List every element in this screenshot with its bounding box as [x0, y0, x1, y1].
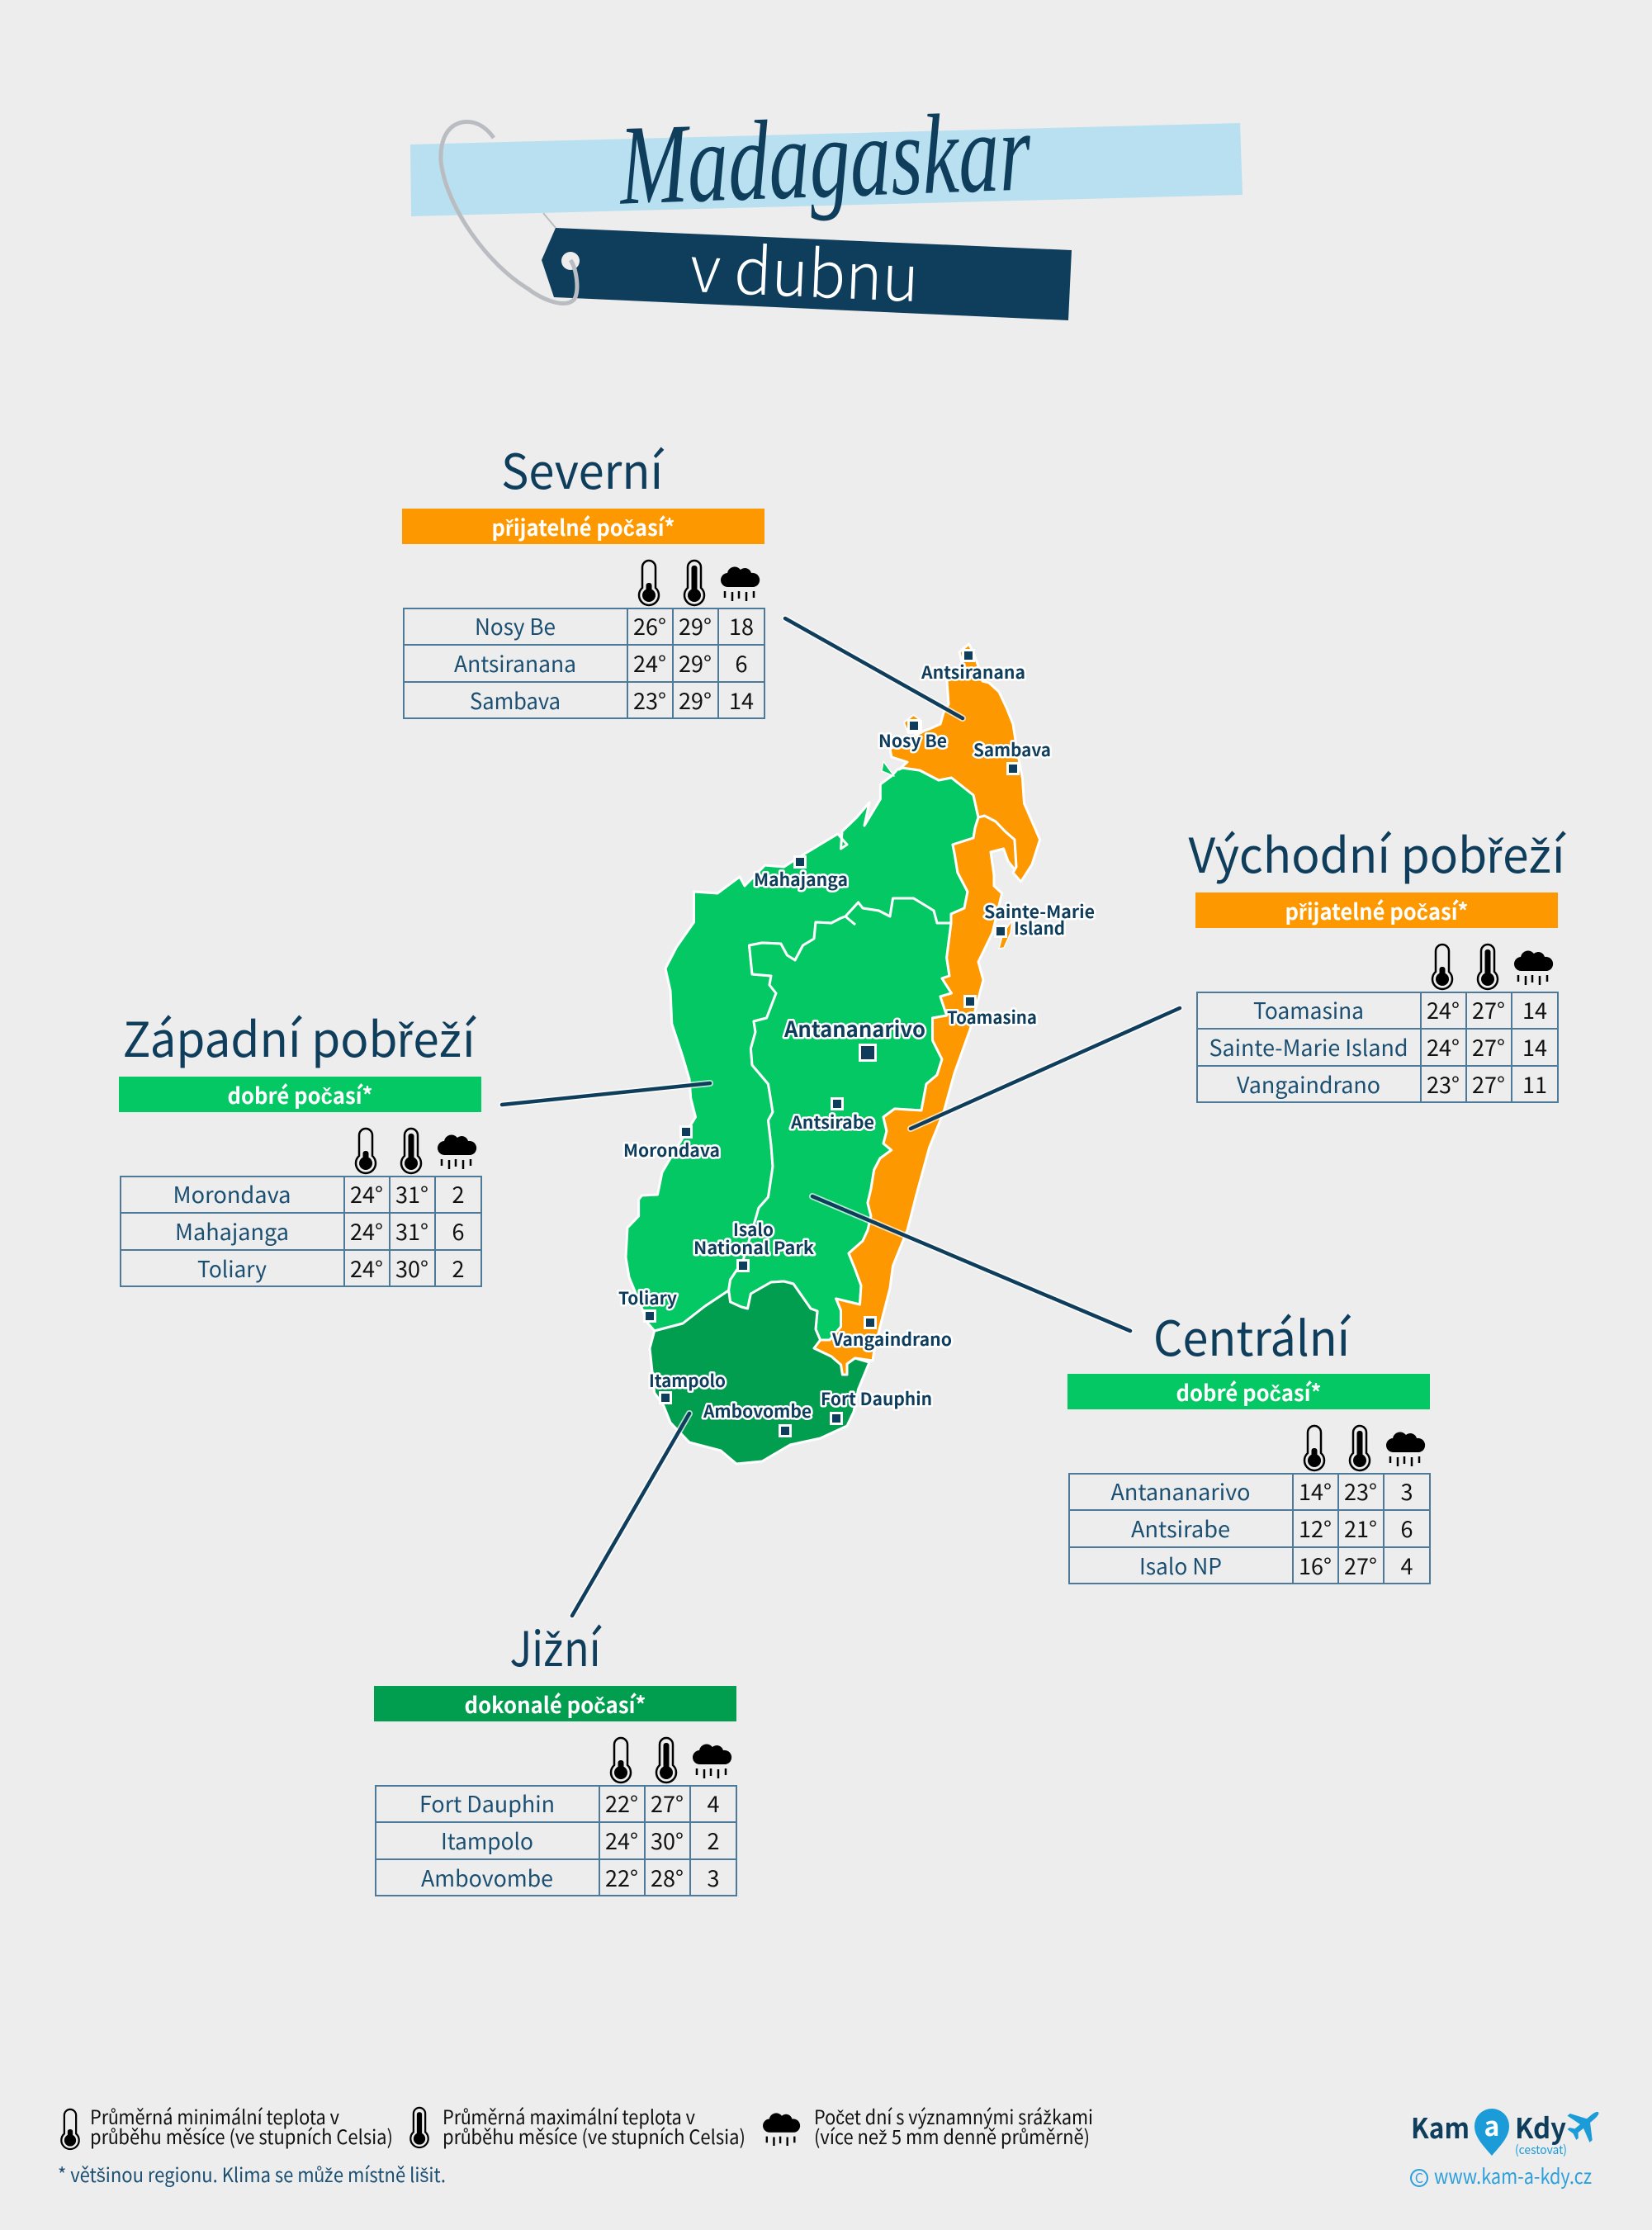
table: 14 — [729, 684, 754, 716]
city labels: Toamasina — [947, 1005, 1037, 1030]
region: south — [650, 1281, 869, 1464]
table: 12° — [1299, 1512, 1332, 1544]
table: 6 — [1400, 1512, 1413, 1544]
legend text: maximum temperature: průběhu měsíce (ve stupních Celsia) — [443, 2121, 746, 2150]
dark tag — [542, 228, 1072, 320]
table: Fort Dauphin — [419, 1787, 555, 1819]
tag ring — [441, 122, 577, 303]
island: Sainte-Marie — [999, 921, 1012, 949]
panel: Východní pobřeží — [1189, 817, 1567, 1102]
city labels: Vangaindrano — [831, 1327, 952, 1352]
footnote: * většinou regionu. Klima se může místně lišit. — [58, 2159, 446, 2188]
leader: Západní pobřeží — [502, 1083, 710, 1105]
weather rating bar: dobré počasí* — [228, 1078, 373, 1110]
island: Nosy Be — [904, 715, 921, 733]
title: Madagaskar: Madagaskar — [616, 88, 1034, 229]
table: Isalo NP — [1139, 1549, 1222, 1581]
heading: Východní pobřeží — [1189, 817, 1567, 887]
table: 27° — [651, 1787, 684, 1819]
tag ring back — [543, 213, 556, 228]
table: 23° — [633, 684, 666, 716]
weather rating bar: přijatelné počasí* — [492, 510, 675, 542]
weather rating bar — [1195, 892, 1558, 928]
table icons — [611, 1738, 731, 1783]
weather rating bar — [402, 509, 764, 544]
table: 18 — [729, 609, 754, 642]
legend text: maximum temperature — [443, 2101, 746, 2150]
table: 4 — [1400, 1549, 1413, 1581]
table: 29° — [679, 646, 712, 679]
table: 27° — [1472, 1030, 1505, 1063]
table: 3 — [1400, 1475, 1413, 1507]
city labels: Morondava — [623, 1138, 720, 1162]
table: Nosy Be — [475, 609, 556, 642]
table — [1069, 1474, 1430, 1584]
table: Antananarivo — [1111, 1475, 1250, 1507]
title banner — [410, 88, 1243, 320]
legend text: rain days: (více než 5 mm denně průměrně) — [814, 2121, 1090, 2150]
leader: Severní — [785, 618, 963, 718]
table: Antsiranana — [454, 646, 576, 679]
icon: rain days — [763, 2113, 800, 2146]
table icons — [639, 561, 760, 605]
logo: Kam a Kdy: Kdy — [1515, 2106, 1566, 2147]
table: Sambava — [470, 684, 561, 716]
website: www.kam-a-kdy.cz — [1434, 2161, 1592, 2190]
table: 4 — [707, 1787, 720, 1819]
region: east coast — [814, 816, 1016, 1375]
table: 24° — [1427, 993, 1460, 1025]
city labels: Antananarivo — [783, 1013, 925, 1044]
panel: Centrální — [1067, 1300, 1430, 1584]
panel: Jižní — [374, 1611, 736, 1896]
table — [1197, 992, 1558, 1102]
table: Ambovombe — [421, 1861, 553, 1893]
legend text: minimum temperature: Průměrná minimální teplota v — [90, 2101, 339, 2130]
table: 24° — [633, 646, 666, 679]
city labels: Antsiranana — [921, 660, 1025, 684]
table: Vangaindrano — [1237, 1068, 1380, 1100]
panel: Severní — [402, 433, 764, 718]
table: 11 — [1522, 1068, 1547, 1100]
city labels: Toliary — [618, 1285, 677, 1310]
legend text: minimum temperature: průběhu měsíce (ve stupních Celsia) — [90, 2121, 393, 2150]
islets: north-west — [882, 761, 894, 776]
table: 22° — [605, 1787, 638, 1819]
logo: Kam a Kdy — [1411, 2099, 1610, 2190]
heading: Centrální — [1153, 1300, 1351, 1370]
table: 29° — [679, 609, 712, 642]
light blue band — [410, 123, 1243, 216]
table: 14 — [1522, 1030, 1547, 1063]
table: 24° — [1427, 1030, 1460, 1063]
legend text: rain days: Počet dní s významnými srážkami — [814, 2101, 1093, 2130]
table icons — [1304, 1426, 1425, 1470]
table: 27° — [1472, 1068, 1505, 1100]
legend text: maximum temperature: Průměrná maximální teplota v — [443, 2101, 695, 2130]
table: 27° — [1472, 993, 1505, 1025]
legend text: minimum temperature — [90, 2101, 393, 2150]
heading: Jižní — [510, 1611, 602, 1680]
icon: maximum temperature — [410, 2108, 428, 2147]
city labels: National Park — [693, 1235, 814, 1260]
table: Morondava — [173, 1177, 291, 1210]
region: central — [729, 898, 951, 1340]
weather rating bar: dobré počasí* — [1176, 1375, 1321, 1408]
table: 23° — [1344, 1475, 1377, 1507]
table: Toamasina — [1253, 993, 1364, 1025]
table — [121, 1177, 481, 1286]
subtitle: v dubnu: v dubnu — [689, 218, 921, 320]
panel: Západní pobřeží — [119, 1001, 481, 1286]
table: Antsirabe — [1131, 1512, 1230, 1544]
city labels: Nosy Be — [878, 728, 947, 753]
table: Sainte-Marie Island — [1209, 1030, 1408, 1063]
table: 16° — [1299, 1549, 1332, 1581]
table icons — [356, 1129, 476, 1173]
table: 31° — [395, 1177, 428, 1210]
table: 26° — [633, 609, 666, 642]
city labels: Itampolo — [649, 1368, 726, 1393]
table: 6 — [735, 646, 748, 679]
city labels — [618, 660, 1095, 1423]
table: 30° — [651, 1824, 684, 1856]
table: 30° — [395, 1252, 428, 1284]
city labels: Antsirabe — [790, 1110, 874, 1134]
leader: Východní pobřeží — [911, 1008, 1180, 1129]
table: 29° — [679, 684, 712, 716]
logo: Kam a Kdy: Kam — [1411, 2106, 1470, 2147]
leader lines — [502, 618, 1180, 1616]
map of Madagascar — [626, 644, 1040, 1464]
table icons — [1432, 945, 1553, 989]
icon: map pin — [1474, 2109, 1509, 2156]
table: 3 — [707, 1861, 720, 1893]
table: Toliary — [197, 1252, 267, 1284]
heading: Severní — [501, 433, 665, 503]
city markers — [644, 651, 1019, 1437]
city labels: Mahajanga — [754, 867, 848, 892]
table: 24° — [350, 1177, 383, 1210]
table: 14° — [1299, 1475, 1332, 1507]
table: Mahajanga — [175, 1214, 289, 1247]
city labels: Sainte-Marie — [984, 899, 1095, 924]
table: 23° — [1427, 1068, 1460, 1100]
table — [376, 1786, 736, 1896]
icon: airplane — [1560, 2099, 1610, 2148]
table: 31° — [395, 1214, 428, 1247]
city labels: Sambava — [973, 737, 1051, 762]
heading: Západní pobřeží — [122, 1001, 476, 1071]
table: 24° — [605, 1824, 638, 1856]
table: 21° — [1344, 1512, 1377, 1544]
spur: inland boundary — [845, 916, 855, 925]
legend — [58, 2101, 1093, 2188]
city labels: Fort Dauphin — [821, 1386, 932, 1411]
website: C — [1415, 2167, 1423, 2187]
city labels: Ambovombe — [703, 1399, 812, 1423]
icon: minimum temperature — [61, 2109, 79, 2149]
region: west coast — [626, 768, 978, 1331]
weather rating bar: přijatelné počasí* — [1285, 894, 1468, 926]
weather rating bar: dokonalé počasí* — [464, 1688, 646, 1720]
table: 2 — [452, 1252, 464, 1284]
table: 24° — [350, 1214, 383, 1247]
table: 24° — [350, 1252, 383, 1284]
weather rating bar — [374, 1686, 736, 1721]
city labels: Island — [1014, 916, 1065, 940]
table: 2 — [707, 1824, 720, 1856]
weather rating bar — [1067, 1374, 1430, 1409]
table: 22° — [605, 1861, 638, 1893]
table: 14 — [1522, 993, 1547, 1025]
weather rating bar — [119, 1077, 481, 1112]
table: 2 — [452, 1177, 464, 1210]
logo: Kam a Kdy: a — [1484, 2106, 1499, 2144]
table: Itampolo — [441, 1824, 533, 1856]
table: 28° — [651, 1861, 684, 1893]
table — [404, 608, 764, 718]
table: 27° — [1344, 1549, 1377, 1581]
tag hole — [561, 252, 580, 270]
table: 6 — [452, 1214, 464, 1247]
region: north — [890, 644, 1040, 882]
leader: Centrální — [812, 1196, 1130, 1331]
logo: Kam a Kdy: (cestovat) — [1515, 2141, 1567, 2158]
leader: Jižní — [572, 1413, 689, 1616]
legend text: rain days — [814, 2101, 1093, 2150]
city labels: Isalo — [733, 1217, 774, 1242]
